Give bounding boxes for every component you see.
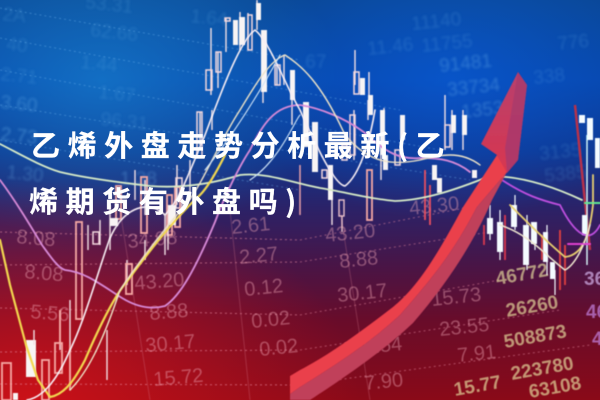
arrow shaft bright band [290,155,507,394]
background numbers: blue zone: 2.73 [0,124,38,149]
background numbers: blue zone: 11.46 [366,34,414,60]
background numbers: red zone: 15.72 [153,365,204,391]
background numbers: red zone: 34.98 [127,227,178,253]
background numbers: red zone: 43.20 [134,269,185,295]
background numbers: red zone: 8.88 [149,300,189,325]
background numbers: blue zone: 40 [5,34,29,57]
background numbers: red zone: 7.90 [363,369,404,395]
background numbers: blue zone: 13530 [460,97,515,123]
background numbers: red zone: 0.12 [243,275,284,301]
arrowhead [481,72,527,173]
background numbers: blue zone: 1.64 [189,6,229,31]
background numbers: blue zone: 33734 [446,75,501,101]
background numbers: red zone: 8.88 [338,247,379,273]
hollow candles [93,15,450,244]
background numbers: yellow table: 508873 [502,321,568,353]
background numbers: blue zone: 91481 [438,51,493,77]
line: white rising [27,30,375,400]
background numbers: red zone: 23.55 [438,314,490,341]
background numbers: red zone: 2.61 [230,213,271,239]
background numbers: red zone: 43.30 [408,193,460,220]
line: magenta right [568,243,590,245]
background numbers: blue zone: 338 [532,65,566,89]
line: yellow [0,155,225,397]
line: faint white top-right [205,55,300,180]
background numbers: red zone: 5.54 [362,333,403,359]
background numbers: blue zone: 1.67 [97,82,136,107]
background numbers: blue zone: 3.60 [0,92,38,117]
background numbers: blue zone: 1.38 [120,169,157,190]
background numbers: blue zone: 3135 [538,140,583,165]
background numbers: red zone: 30.17 [145,331,196,357]
line: pink purple right [502,180,600,235]
wicks [60,0,463,380]
white filled candles [13,3,477,400]
background numbers: yellow table: 223780 [509,353,575,385]
background numbers: blue zone: 5385 [543,162,588,187]
background numbers: blue zone: 1.44 [79,52,119,77]
title line 2: 烯期货有外盘吗) [29,179,304,221]
background numbers: yellow table: 26260 [504,292,560,322]
background numbers: red zone: 0.02 [250,307,291,333]
reddish candles [2,105,590,400]
line: pale yellow [70,55,480,390]
background numbers: red zone: 2.27 [238,243,279,269]
line: green right [585,202,600,204]
background numbers: blue zone: 776 [556,31,590,55]
title [29,123,452,221]
background numbers: blue zone: 2.71 [0,64,38,89]
background numbers: blue zone: .67 [300,52,326,73]
background numbers: yellow table [452,260,600,400]
title line 1: 乙烯外盘走势分析最新(乙 [31,123,452,165]
background numbers: blue zone: 11140 [410,9,462,35]
background numbers: red zone: 8.08 [24,261,64,286]
background numbers: yellow table: 46772 [494,260,550,290]
background numbers: red zone: 15.73 [430,284,482,311]
arrow shaft shaded band [290,172,507,400]
background numbers: red zone: 8.08 [16,226,56,251]
background numbers: blue zone: 96.31 [99,109,149,135]
candlestick chart: right side [487,115,600,295]
background numbers: red zone [16,193,497,395]
line: pale green [0,144,582,201]
background numbers: blue zone: 62.66 [89,20,139,46]
background numbers: red zone: 43.20 [324,220,376,247]
background numbers: red zone: 30.17 [336,280,388,307]
background numbers: blue zone: 2A [1,4,27,27]
red rising arrow [290,72,527,400]
background numbers: red zone: 5.56 [30,301,70,326]
background numbers: blue zone: 1.30 [5,162,44,187]
line: orange right [510,175,593,257]
background numbers: red zone: 7.91 [456,341,497,367]
background numbers: blue zone [0,0,590,190]
background numbers: red zone: 0.02 [258,335,299,361]
background numbers: blue zone: 11755 [420,31,474,57]
line: pink purple [0,105,470,308]
